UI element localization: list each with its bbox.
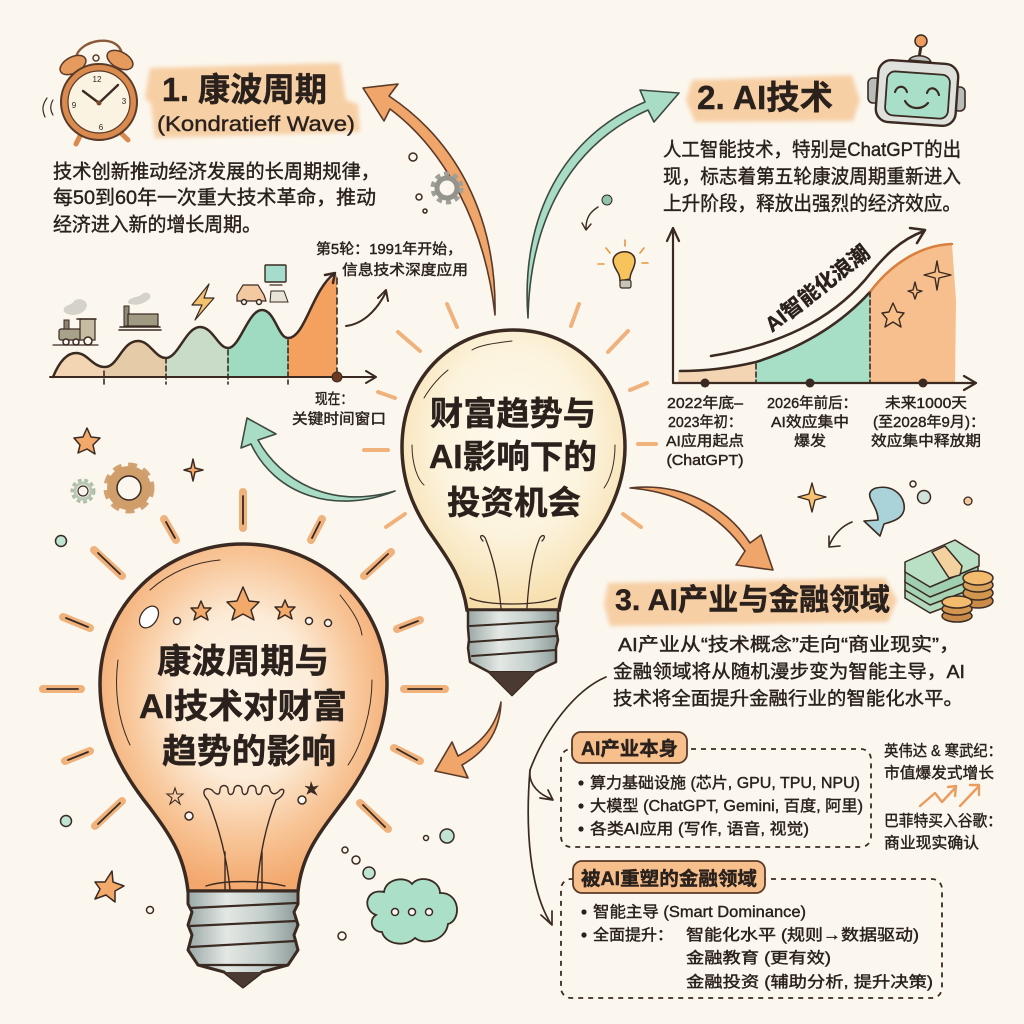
note: market growth: 巴菲特买入谷歌： xyxy=(884,812,1002,830)
arrow: centre bulb to lower bulb xyxy=(435,702,501,778)
icon: car and computer xyxy=(237,265,288,304)
text: Kondratieff description: 技术创新推动经济发展的长周期规律， xyxy=(53,161,380,183)
bulb screw base xyxy=(468,610,558,695)
central light bulb: AI影响下的 xyxy=(429,438,597,475)
heading: 1. Kondratieff Wave: (Kondratieff Wave) xyxy=(157,113,355,136)
wave line xyxy=(53,274,334,377)
text: AI industry description: 技术将全面提升金融行业的智能化水平。 xyxy=(613,688,963,709)
bulb title: 财富趋势与 xyxy=(430,395,596,432)
chart fills xyxy=(678,362,756,382)
decorative icons left xyxy=(56,428,203,914)
lower light bulb xyxy=(43,492,445,987)
bulb glass xyxy=(402,330,625,610)
icon: lightning bolt xyxy=(192,284,214,320)
lower bulb base xyxy=(188,891,298,987)
text: AI industry description: AI产业从“技术概念”走向“商业现实”， xyxy=(618,634,960,655)
icon: small gear xyxy=(73,481,93,501)
text: AI technology description: 上升阶段，释放出强烈的经济效应。 xyxy=(663,193,961,215)
chart period labels: 效应集中释放期 xyxy=(871,432,981,450)
panel list: 各类AI应用 (写作, 语音, 视觉) xyxy=(590,819,809,838)
icon: alarm clock xyxy=(43,41,137,144)
heading: 3. AI industry and finance xyxy=(604,578,897,626)
panel label: 被AI重塑的金融领域 xyxy=(581,867,757,890)
lower bulb text: 康波周期与 xyxy=(157,643,329,681)
central light bulb: 投资机会 xyxy=(447,484,581,521)
arrow: centre bulb to wave chart xyxy=(241,418,395,501)
note: now xyxy=(292,391,386,428)
note: now: 现在： xyxy=(315,391,353,408)
icon: bottom star xyxy=(95,871,124,902)
panel list: 智能化水平 (规则→数据驱动) xyxy=(686,926,919,944)
text: Kondratieff description xyxy=(53,161,380,236)
panel label: AI产业本身 xyxy=(581,738,678,760)
chart period labels: 2022年底– xyxy=(667,395,744,412)
lower light bulb: 趋势的影响 xyxy=(162,733,336,771)
icon: alarm clock: 6 xyxy=(99,123,104,132)
icon: swirl xyxy=(864,487,904,536)
chart label: AI智能化浪潮 xyxy=(761,241,874,337)
chart period labels: 2026年前后： xyxy=(767,395,857,412)
panel list: 大模型 (ChatGPT, Gemini, 百度, 阿里) xyxy=(590,797,863,815)
note: fifth wave xyxy=(316,240,468,279)
growth arrows xyxy=(920,785,979,806)
icon: stack of money and coins xyxy=(905,540,993,622)
panel label xyxy=(573,861,765,893)
icon: alarm clock: 12 xyxy=(93,75,102,84)
panel list: 智能主导 (Smart Dominance) xyxy=(593,903,806,921)
chart period labels: AI效应集中 xyxy=(771,413,849,431)
panel list xyxy=(578,773,863,838)
note: market growth: 市值爆发式增长 xyxy=(884,763,994,782)
text: AI technology description: 现，标志着第五轮康波周期重新进入 xyxy=(663,166,961,188)
lower light bulb: AI技术对财富 xyxy=(139,688,347,726)
chart period labels xyxy=(666,395,985,469)
text: Kondratieff description: 经济进入新的增长周期。 xyxy=(53,214,261,236)
axis and dividers xyxy=(50,371,376,383)
chart period labels: (至2028年9月)： xyxy=(873,414,985,431)
heading: 2. AI technology: 2. AI技术 xyxy=(697,79,833,116)
note: market growth xyxy=(884,741,1002,852)
panel: finance reshaped by AI xyxy=(561,861,942,998)
arrow to fifth wave note xyxy=(346,290,388,326)
icon: steam locomotive xyxy=(53,299,98,345)
arrow: centre bulb to Kondratieff section xyxy=(363,84,495,315)
note: market growth: 商业现实确认 xyxy=(884,834,979,852)
lower bulb rays xyxy=(43,492,445,829)
panel list: 金融投资 (辅助分析, 提升决策) xyxy=(686,973,933,991)
chart period labels: 爆发 xyxy=(794,433,826,450)
icon: sparkle xyxy=(184,459,203,481)
panel list: 金融教育 (更有效) xyxy=(686,949,831,967)
central light bulb xyxy=(364,304,656,695)
icon: star xyxy=(74,428,100,454)
lower filament xyxy=(204,786,285,890)
heading: 3. AI industry and finance: 3. AI产业与金融领域 xyxy=(615,584,890,617)
stars inside lower bulb xyxy=(191,587,295,620)
text: AI technology description: 人工智能技术，特别是ChatGPT的出 xyxy=(663,139,961,161)
icon: large gear xyxy=(108,467,150,509)
chart: AI wave curve xyxy=(666,228,985,469)
panel list: 全面提升： xyxy=(593,926,673,944)
panel: AI industry xyxy=(561,732,871,847)
decorative icons right xyxy=(798,481,972,547)
panel label xyxy=(572,732,687,763)
text: AI industry description: 金融领域将从随机漫步变为智能主导，AI xyxy=(613,661,965,682)
chart period labels: (ChatGPT) xyxy=(666,453,744,469)
icon: light bulb and dotted arrow xyxy=(582,195,648,288)
text: Kondratieff description: 每50到60年一次重大技术革命，推动 xyxy=(53,187,376,209)
icon: alarm clock: 9 xyxy=(72,101,77,110)
connector arrows to sub-boxes xyxy=(528,677,606,925)
note: market growth: 英伟达 & 寒武纪： xyxy=(884,741,1002,760)
chart axes xyxy=(667,228,976,390)
chart curves xyxy=(680,292,870,371)
chart period labels: AI应用起点 xyxy=(666,432,744,450)
heading: 2. AI technology xyxy=(686,75,860,122)
filament xyxy=(470,536,556,608)
bulb rays xyxy=(364,304,656,527)
note: fifth wave: 第5轮：1991年开始， xyxy=(316,240,462,258)
panel list xyxy=(581,903,933,991)
lower bulb glass xyxy=(100,544,387,891)
chart: Kondratieff waves xyxy=(50,240,468,428)
panel list: 算力基础设施 (芯片, GPU, TPU, NPU) xyxy=(590,773,860,792)
heading: 1. Kondratieff Wave xyxy=(145,63,360,138)
chart period labels: 未来1000天 xyxy=(885,395,967,412)
icons: stars on orange area xyxy=(882,261,951,327)
chart period labels: 2023年初： xyxy=(668,414,742,431)
note: now: 关键时间窗口 xyxy=(292,410,386,428)
wave fills xyxy=(53,353,105,377)
thought cloud and bubbles xyxy=(338,829,457,944)
icon: gear and bubbles xyxy=(409,153,461,213)
note: fifth wave: 信息技术深度应用 xyxy=(342,261,468,279)
icon: factory xyxy=(119,293,161,330)
icon: sparkle xyxy=(798,483,826,512)
highlight xyxy=(136,603,162,631)
text: AI industry description xyxy=(613,634,965,709)
icon: robot xyxy=(868,35,965,127)
arrow: centre bulb to AI technology section xyxy=(527,90,679,318)
heading: 1. Kondratieff Wave: 1. 康波周期 xyxy=(162,71,327,108)
icon: alarm clock: 3 xyxy=(122,97,127,106)
text: AI technology description xyxy=(663,139,961,215)
arrow: centre bulb to AI industry section xyxy=(630,487,773,570)
